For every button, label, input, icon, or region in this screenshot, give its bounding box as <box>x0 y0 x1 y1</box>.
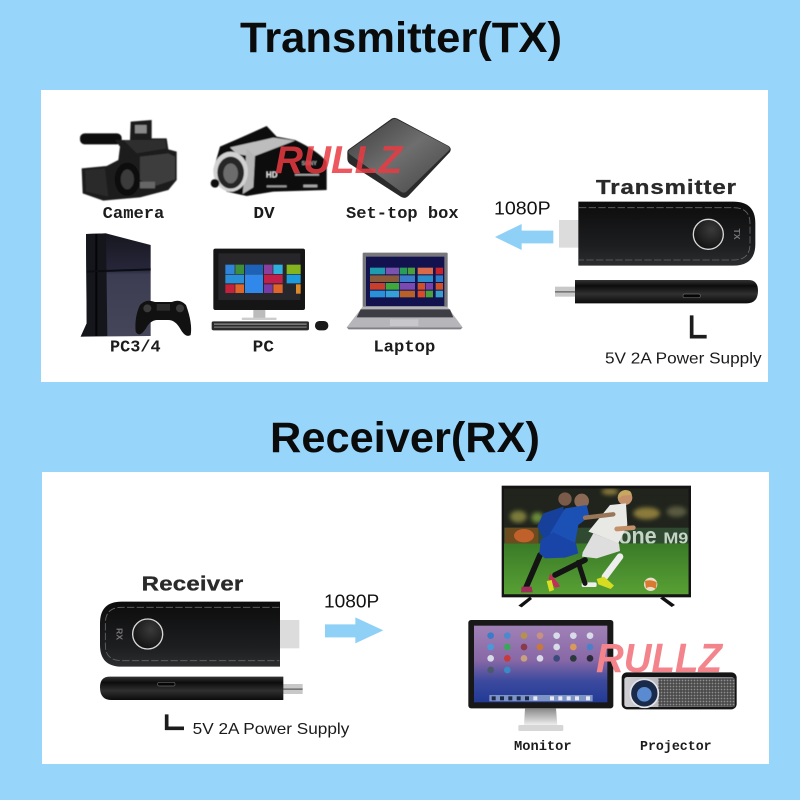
panel: receiver <box>42 472 769 764</box>
icon: TX dongle front <box>578 202 755 266</box>
label: Monitor: Monitor <box>514 739 572 755</box>
label: PC3/4: PC3/4 <box>110 339 161 358</box>
icon: HDMI plug <box>280 620 299 648</box>
label: Transmitter: Transmitter <box>596 176 736 199</box>
watermark: RULLZ: RULLZ <box>275 139 404 182</box>
label: Camera: Camera <box>103 205 164 224</box>
label: Receiver: Receiver <box>142 573 244 595</box>
icon: HDMI plug <box>559 220 579 248</box>
panel: transmitter <box>41 90 768 382</box>
icon: RX dongle front <box>100 602 280 667</box>
blue players <box>558 492 572 506</box>
receiver device group <box>100 573 383 738</box>
icon: RX dongle side <box>100 677 303 700</box>
label: power supply: 5V 2A Power Supply <box>605 350 762 367</box>
icon: power bracket <box>167 714 184 728</box>
arrow: to source <box>495 224 553 250</box>
icon: camera <box>80 120 177 201</box>
watermark: RULLZ: RULLZ <box>596 635 724 681</box>
icon: TX dongle front: TX <box>732 228 742 240</box>
source devices <box>80 118 463 358</box>
icon: TV with football match <box>502 486 691 607</box>
label: PC: PC <box>253 339 274 358</box>
arrow: to display <box>325 617 383 643</box>
icon: RX dongle front: RX <box>114 628 124 640</box>
white player <box>605 557 620 577</box>
transmitter device group <box>494 176 762 367</box>
icon: TV with football match: one <box>618 523 657 550</box>
label: DV: DV <box>253 205 275 224</box>
label: 1080P: 1080P <box>324 591 379 612</box>
title: Transmitter(TX): Transmitter(TX) <box>240 14 562 62</box>
label: Projector: Projector <box>640 739 712 755</box>
icon: PS3/4 console <box>81 233 191 337</box>
icon: DV camcorder: HD <box>266 170 278 179</box>
icon: DV camcorder <box>211 126 327 196</box>
icon: projector <box>622 672 737 709</box>
icon: set-top box <box>347 118 451 198</box>
icon: PC <box>212 249 328 330</box>
label: Set-top box: Set-top box <box>346 205 459 224</box>
icon: laptop <box>347 253 463 329</box>
title: Receiver(RX): Receiver(RX) <box>270 414 540 462</box>
display devices <box>468 486 737 755</box>
label: power supply: 5V 2A Power Supply <box>193 721 349 738</box>
icon: DV camcorder: SONY <box>302 161 317 167</box>
label: 1080P: 1080P <box>494 197 551 218</box>
label: Laptop: Laptop <box>373 339 435 358</box>
icon: monitor <box>468 620 613 731</box>
icon: TV with football match: M9 <box>663 530 688 547</box>
icon: power bracket <box>692 315 707 337</box>
icon: TX dongle side <box>555 280 758 303</box>
